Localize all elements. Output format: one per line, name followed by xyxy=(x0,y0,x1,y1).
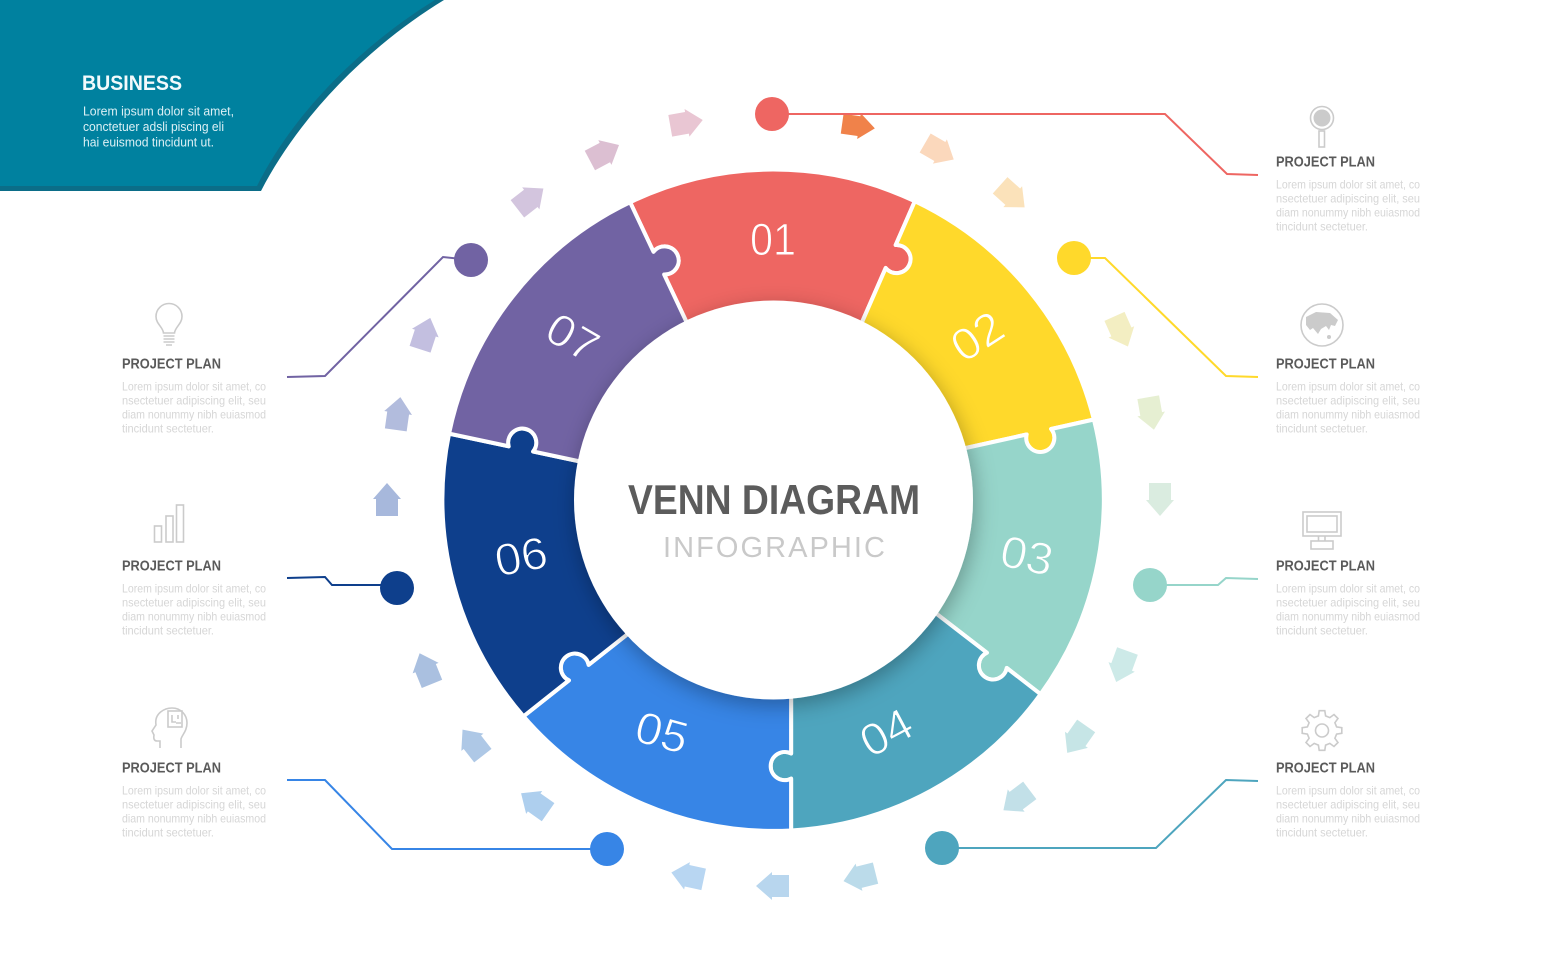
body text xyxy=(1276,178,1420,234)
banner text xyxy=(83,104,234,150)
number 03: 03 xyxy=(996,525,1058,586)
body text: tincidunt sectetuer. xyxy=(122,624,214,638)
arrow xyxy=(373,483,401,516)
body text xyxy=(122,582,266,638)
panel: project plan 03 xyxy=(1276,512,1420,638)
center title: VENN DIAGRAM xyxy=(628,476,920,523)
connector 04 xyxy=(925,780,1258,865)
body text: diam nonummy nibh euiasmod xyxy=(1276,206,1420,220)
body text: Lorem ipsum dolor sit amet, co xyxy=(122,784,266,798)
panel: project plan 06 xyxy=(122,505,266,638)
arrow xyxy=(513,782,556,824)
number 04: 04 xyxy=(851,698,921,767)
number 06: 06 xyxy=(490,526,552,586)
arrow xyxy=(918,131,961,172)
arrow xyxy=(1056,718,1098,761)
body text: nsectetuer adipiscing elit, seu xyxy=(1276,192,1420,206)
center circle xyxy=(574,300,973,700)
arrow xyxy=(1134,395,1168,432)
header banner xyxy=(0,0,444,191)
segment numbers xyxy=(490,215,1058,767)
connector 02 xyxy=(1057,241,1258,377)
arrow xyxy=(756,872,789,900)
body text: Lorem ipsum dolor sit amet, co xyxy=(1276,178,1420,192)
segment 07 xyxy=(449,202,690,463)
body text: diam nonummy nibh euiasmod xyxy=(1276,812,1420,826)
segment 06 xyxy=(442,429,632,716)
heading: PROJECT PLAN xyxy=(1276,760,1375,776)
number 05: 05 xyxy=(630,701,694,764)
body text: Lorem ipsum dolor sit amet, co xyxy=(122,582,266,596)
arrow xyxy=(382,395,414,432)
body text xyxy=(1276,380,1420,436)
number 07: 07 xyxy=(537,302,608,372)
arrow xyxy=(509,178,552,220)
body text xyxy=(1276,784,1420,840)
body text: tincidunt sectetuer. xyxy=(1276,826,1368,840)
body text xyxy=(122,784,266,840)
body text: Lorem ipsum dolor sit amet, co xyxy=(1276,582,1420,596)
banner title: BUSINESS xyxy=(82,72,182,95)
segment 01 xyxy=(630,170,915,330)
icon: light bulb xyxy=(156,304,182,345)
segment 02 xyxy=(859,201,1094,452)
arrow xyxy=(668,859,707,893)
body text: Lorem ipsum dolor sit amet, co xyxy=(1276,380,1420,394)
body text xyxy=(122,380,266,436)
body text: Lorem ipsum dolor sit amet, co xyxy=(1276,784,1420,798)
arrow xyxy=(668,106,705,140)
body text: tincidunt sectetuer. xyxy=(122,826,214,840)
arrow xyxy=(1103,646,1141,687)
arrow xyxy=(407,648,445,689)
icon: magnifier xyxy=(1310,106,1334,147)
arrow xyxy=(995,779,1038,821)
body text: diam nonummy nibh euiasmod xyxy=(1276,610,1420,624)
body text: diam nonummy nibh euiasmod xyxy=(122,408,266,422)
body text: diam nonummy nibh euiasmod xyxy=(122,610,266,624)
banner text: Lorem ipsum dolor sit amet, xyxy=(83,104,234,118)
body text: diam nonummy nibh euiasmod xyxy=(1276,408,1420,422)
icon: head with circuit xyxy=(152,708,187,748)
body text: nsectetuer adipiscing elit, seu xyxy=(122,394,266,408)
body text: tincidunt sectetuer. xyxy=(1276,422,1368,436)
body text xyxy=(1276,582,1420,638)
arrow xyxy=(1102,311,1141,352)
heading: PROJECT PLAN xyxy=(122,356,221,372)
arrow xyxy=(1146,483,1174,516)
icon: gear xyxy=(1302,711,1342,750)
arrow xyxy=(840,860,879,895)
icon: bar chart xyxy=(154,505,184,542)
body text: nsectetuer adipiscing elit, seu xyxy=(1276,798,1420,812)
arrow xyxy=(452,721,494,764)
number 01: 01 xyxy=(750,215,796,265)
icon: globe xyxy=(1301,304,1343,346)
panel: project plan 01 xyxy=(1276,106,1420,234)
heading: PROJECT PLAN xyxy=(1276,154,1375,170)
arrow xyxy=(407,314,444,354)
puzzle ring xyxy=(442,170,1104,831)
panel: project plan 07 xyxy=(122,304,266,436)
center subtitle: INFOGRAPHIC xyxy=(663,532,885,564)
segment 03 xyxy=(931,420,1104,694)
body text: tincidunt sectetuer. xyxy=(1276,624,1368,638)
heading: PROJECT PLAN xyxy=(1276,356,1375,372)
body text: Lorem ipsum dolor sit amet, co xyxy=(122,380,266,394)
panel: project plan 04 xyxy=(1276,711,1420,840)
icon: computer xyxy=(1303,512,1341,549)
body text: nsectetuer adipiscing elit, seu xyxy=(1276,394,1420,408)
body text: diam nonummy nibh euiasmod xyxy=(122,812,266,826)
heading: PROJECT PLAN xyxy=(122,558,221,574)
arrow xyxy=(583,133,626,173)
body text: tincidunt sectetuer. xyxy=(1276,220,1368,234)
heading: PROJECT PLAN xyxy=(1276,558,1375,574)
body text: nsectetuer adipiscing elit, seu xyxy=(122,596,266,610)
arrow xyxy=(991,175,1034,218)
connector 01 xyxy=(755,97,1258,175)
panel: project plan 05 xyxy=(122,708,266,840)
arrow: active xyxy=(840,111,877,141)
panel: project plan 02 xyxy=(1276,304,1420,436)
segment 04 xyxy=(771,610,1041,830)
segment 05 xyxy=(524,631,791,831)
body text: nsectetuer adipiscing elit, seu xyxy=(122,798,266,812)
number 02: 02 xyxy=(941,301,1013,372)
ring of direction arrows xyxy=(373,106,1174,900)
connector 05 xyxy=(287,780,624,866)
heading: PROJECT PLAN xyxy=(122,760,221,776)
connector 03 xyxy=(1133,568,1258,602)
banner text: conctetuer adsli piscing eli xyxy=(83,119,224,134)
body text: tincidunt sectetuer. xyxy=(122,422,214,436)
banner text: hai euismod tincidunt ut. xyxy=(83,134,214,150)
connector 07 xyxy=(287,243,488,377)
connector 06 xyxy=(287,571,414,605)
body text: nsectetuer adipiscing elit, seu xyxy=(1276,596,1420,610)
